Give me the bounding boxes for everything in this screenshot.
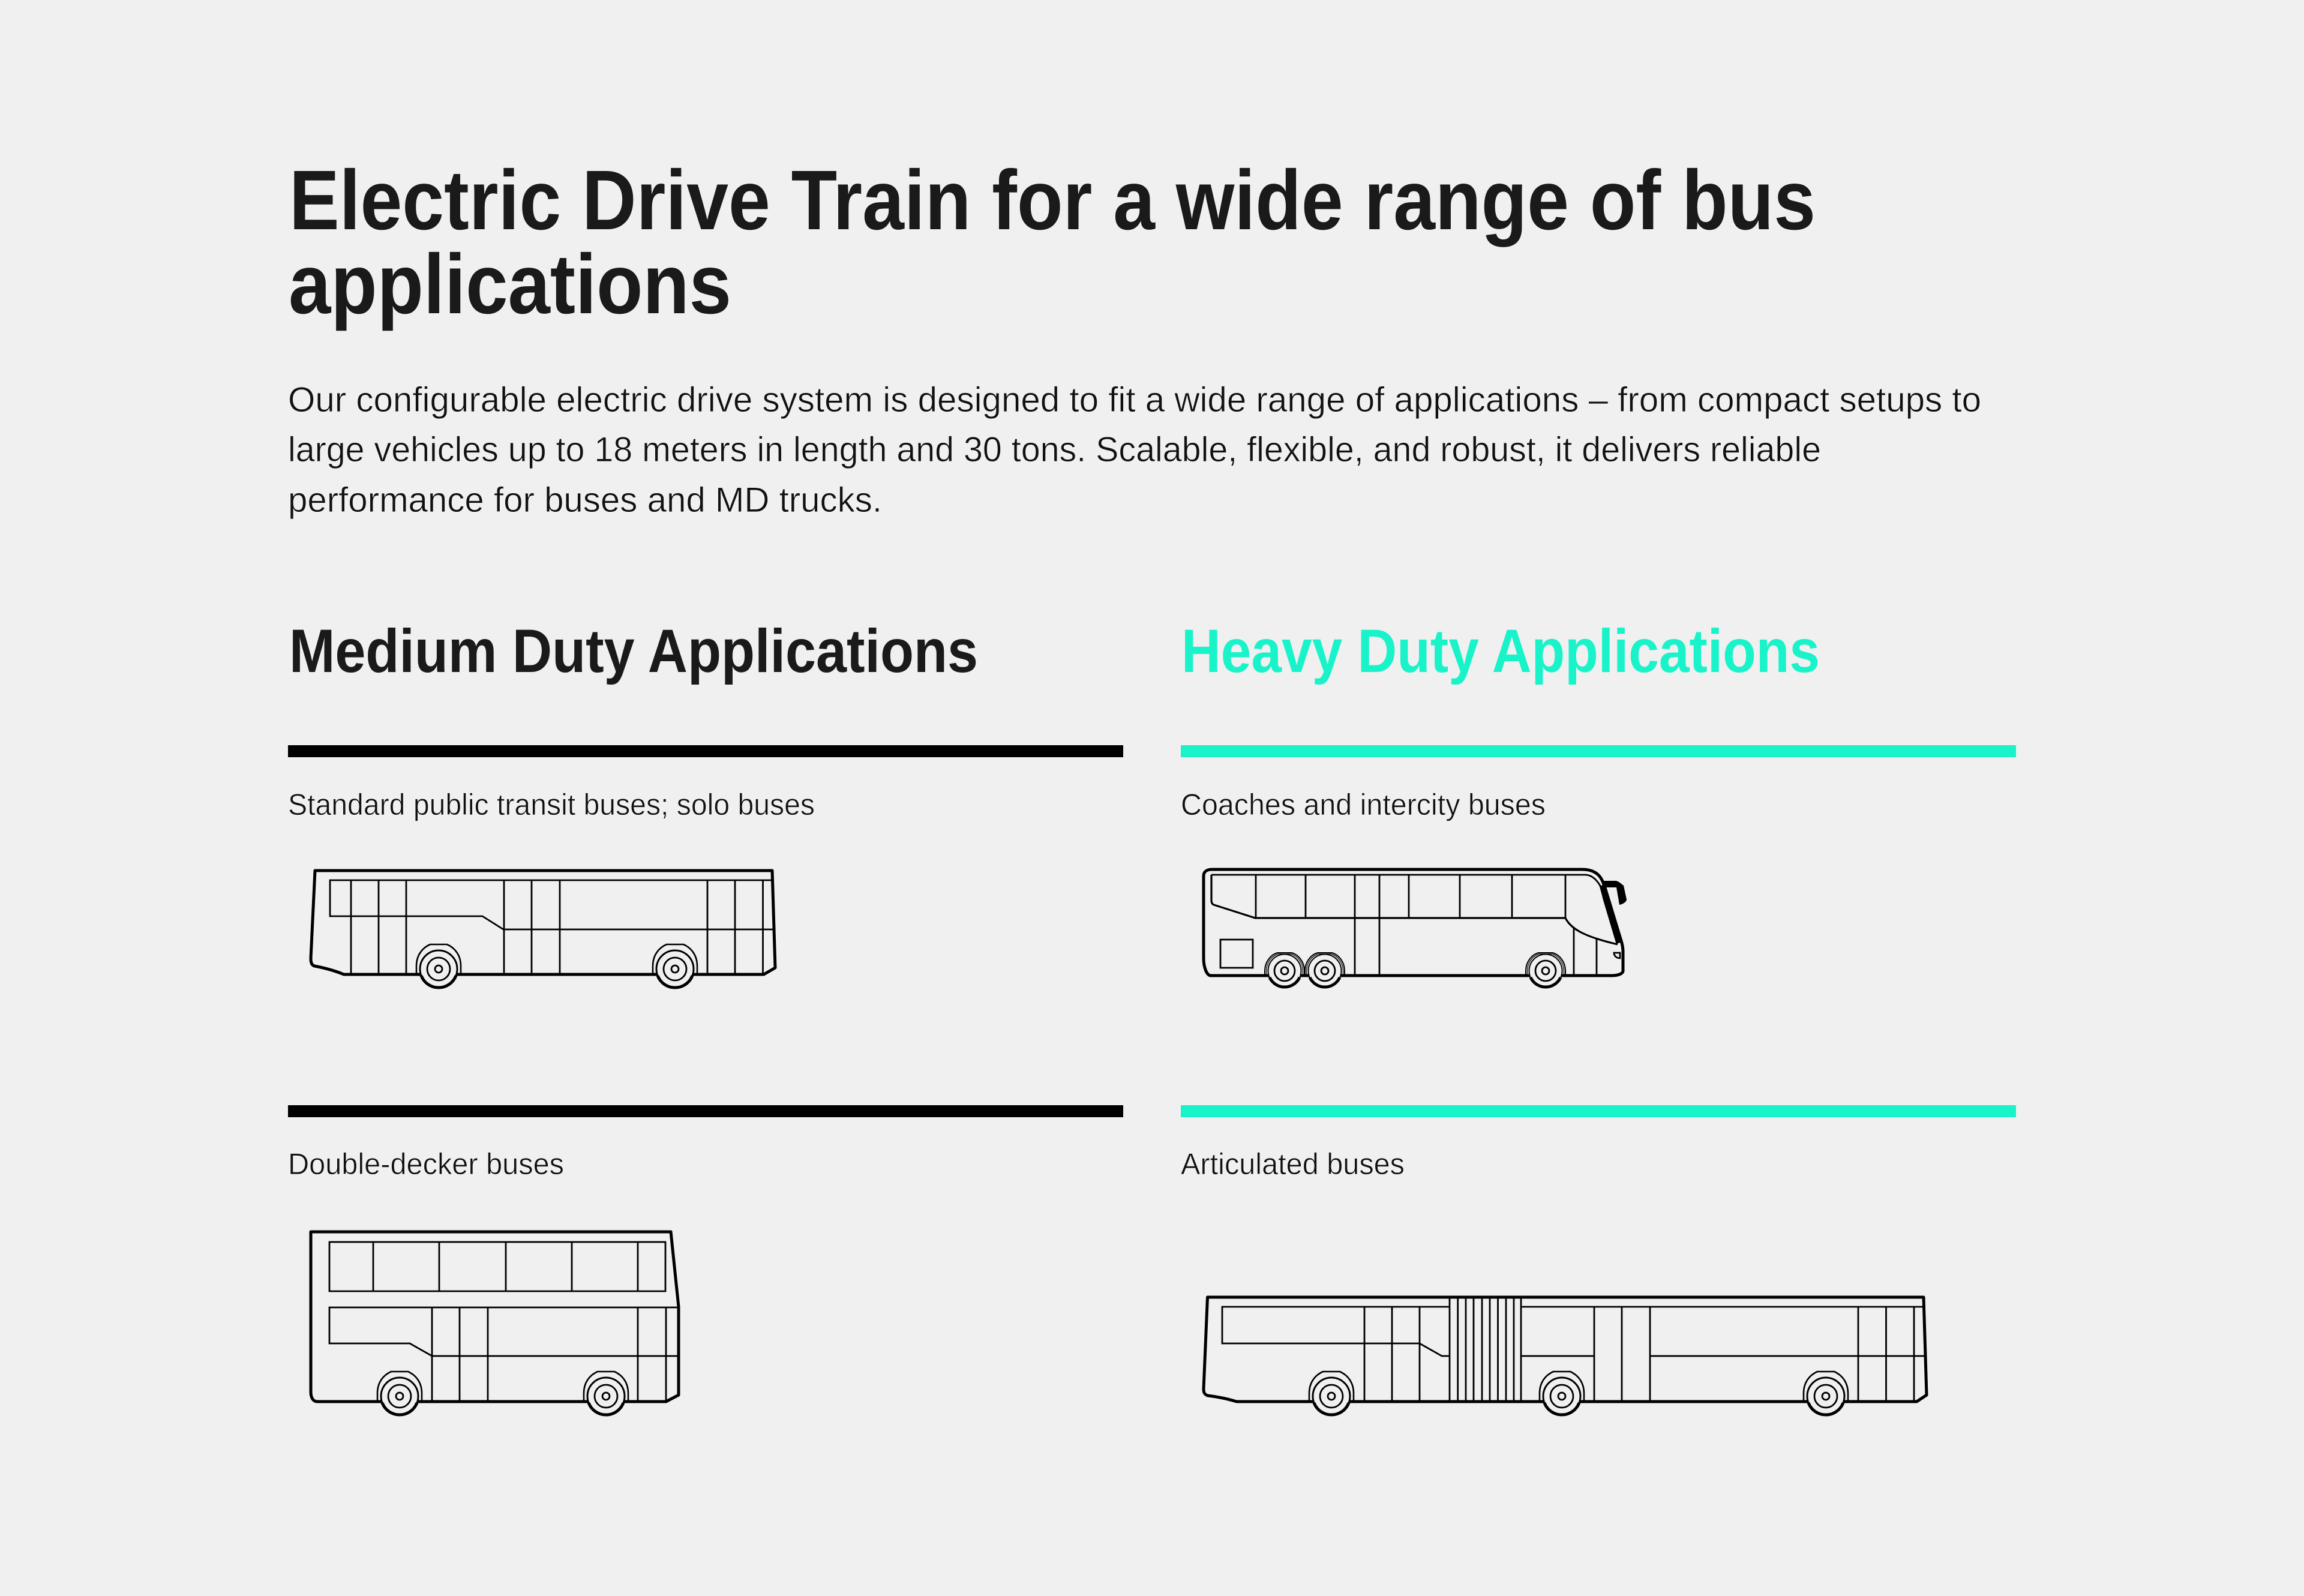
intro paragraph: large vehicles up to 18 meters in length and 30 tons. Scalable, flexible, and robust, it delivers reliable bbox=[288, 430, 1821, 469]
caption: coaches: Coaches and intercity buses bbox=[1181, 788, 1546, 821]
icon: articulated bus bbox=[1204, 1297, 1927, 1415]
intro paragraph: Our configurable electric drive system is designed to fit a wide range of applications – from compact setups to bbox=[288, 380, 1981, 419]
caption: articulated: Articulated buses bbox=[1181, 1147, 1405, 1181]
caption: double-decker: Double-decker buses bbox=[288, 1147, 564, 1181]
bar: medium duty row 1 bbox=[288, 745, 1123, 757]
icon: double-decker bus bbox=[311, 1232, 679, 1415]
icon: solo bus bbox=[311, 871, 775, 988]
heading: medium duty: Medium Duty Applications bbox=[289, 617, 978, 685]
bar: medium duty row 2 bbox=[288, 1105, 1123, 1117]
title: applications bbox=[289, 236, 731, 331]
heading: heavy duty: Heavy Duty Applications bbox=[1181, 617, 1820, 685]
intro paragraph bbox=[288, 380, 1981, 520]
title bbox=[289, 152, 1816, 331]
intro paragraph: performance for buses and MD trucks. bbox=[288, 481, 882, 520]
bar: heavy duty row 2 bbox=[1181, 1105, 2016, 1117]
caption: standard buses: Standard public transit buses; solo buses bbox=[288, 788, 815, 821]
bar: heavy duty row 1 bbox=[1181, 745, 2016, 757]
title: Electric Drive Train for a wide range of bus bbox=[289, 152, 1816, 247]
icon: coach bbox=[1204, 869, 1627, 988]
